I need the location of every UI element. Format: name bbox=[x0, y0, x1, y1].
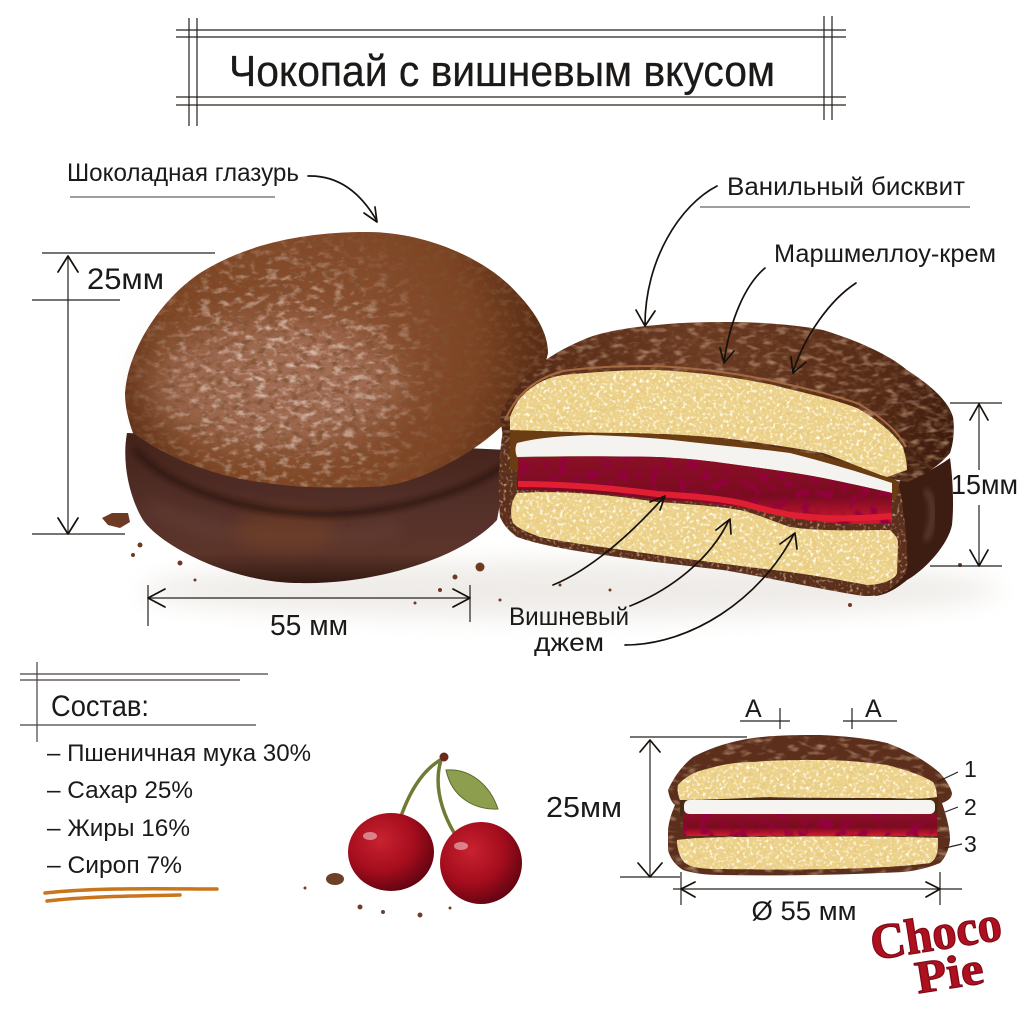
whole choco pie bbox=[125, 232, 548, 583]
chocolate glaze on cut half bbox=[500, 322, 954, 482]
section A markers bbox=[740, 695, 897, 729]
title bbox=[176, 16, 846, 126]
shadow under pies bbox=[140, 562, 1000, 618]
vanilla sponge top bbox=[510, 370, 907, 477]
sponge bottom bbox=[511, 492, 898, 585]
dimension: width 55 mm: 55 мм bbox=[270, 610, 348, 642]
section A markers: А bbox=[745, 695, 762, 723]
composition list bbox=[47, 740, 311, 879]
label: vanilla sponge: Ванильный бисквит bbox=[727, 173, 966, 201]
dimension: height 25 mm bbox=[32, 253, 215, 534]
section dimensions: 25мм bbox=[546, 792, 622, 824]
logo: Choco Pie bbox=[866, 895, 1005, 1003]
label: chocolate glaze bbox=[67, 159, 377, 222]
marshmallow layer bbox=[516, 435, 892, 493]
cherries illustration bbox=[304, 752, 522, 918]
dimension: height 25 mm: 25мм bbox=[87, 263, 164, 296]
composition list: – Сироп 7% bbox=[47, 852, 182, 879]
crumbs bbox=[102, 513, 962, 607]
dimension: layer 15 mm bbox=[930, 403, 1018, 566]
cut choco pie bbox=[499, 322, 954, 596]
section dimensions: Ø 55 мм bbox=[752, 896, 856, 926]
section numbered callouts: 2 bbox=[964, 794, 977, 820]
dark band between sponge and cream bbox=[510, 425, 900, 500]
logo: Choco Pie: Choco bbox=[866, 895, 1005, 971]
dimension: layer 15 mm: 15мм bbox=[951, 469, 1018, 500]
label: marshmallow bbox=[720, 240, 996, 373]
logo: Choco Pie: Pie bbox=[912, 942, 987, 1003]
section numbered callouts: 3 bbox=[964, 831, 977, 857]
title: Чокопай с вишневым вкусом bbox=[229, 47, 775, 96]
composition list: – Жиры 16% bbox=[47, 815, 190, 842]
section dimensions bbox=[546, 737, 962, 926]
dimension: width 55 mm bbox=[148, 585, 470, 642]
composition heading: Состав: bbox=[51, 690, 149, 723]
label: cherry jam: Вишневый bbox=[509, 603, 629, 631]
label: cherry jam: джем bbox=[534, 629, 604, 657]
label: marshmallow: Маршмеллоу-крем bbox=[774, 240, 996, 268]
section numbered callouts: 1 bbox=[964, 756, 977, 782]
technical section diagram bbox=[668, 735, 952, 875]
composition list: – Сахар 25% bbox=[47, 777, 193, 804]
composition panel bbox=[20, 662, 311, 901]
label: vanilla sponge bbox=[636, 173, 970, 326]
label: chocolate glaze: Шоколадная глазурь bbox=[67, 159, 299, 187]
section A markers: А bbox=[865, 695, 882, 723]
jam layer bbox=[517, 456, 892, 524]
section numbered callouts bbox=[937, 756, 977, 857]
label: cherry jam bbox=[509, 496, 797, 657]
composition list: – Пшеничная мука 30% bbox=[47, 740, 311, 767]
